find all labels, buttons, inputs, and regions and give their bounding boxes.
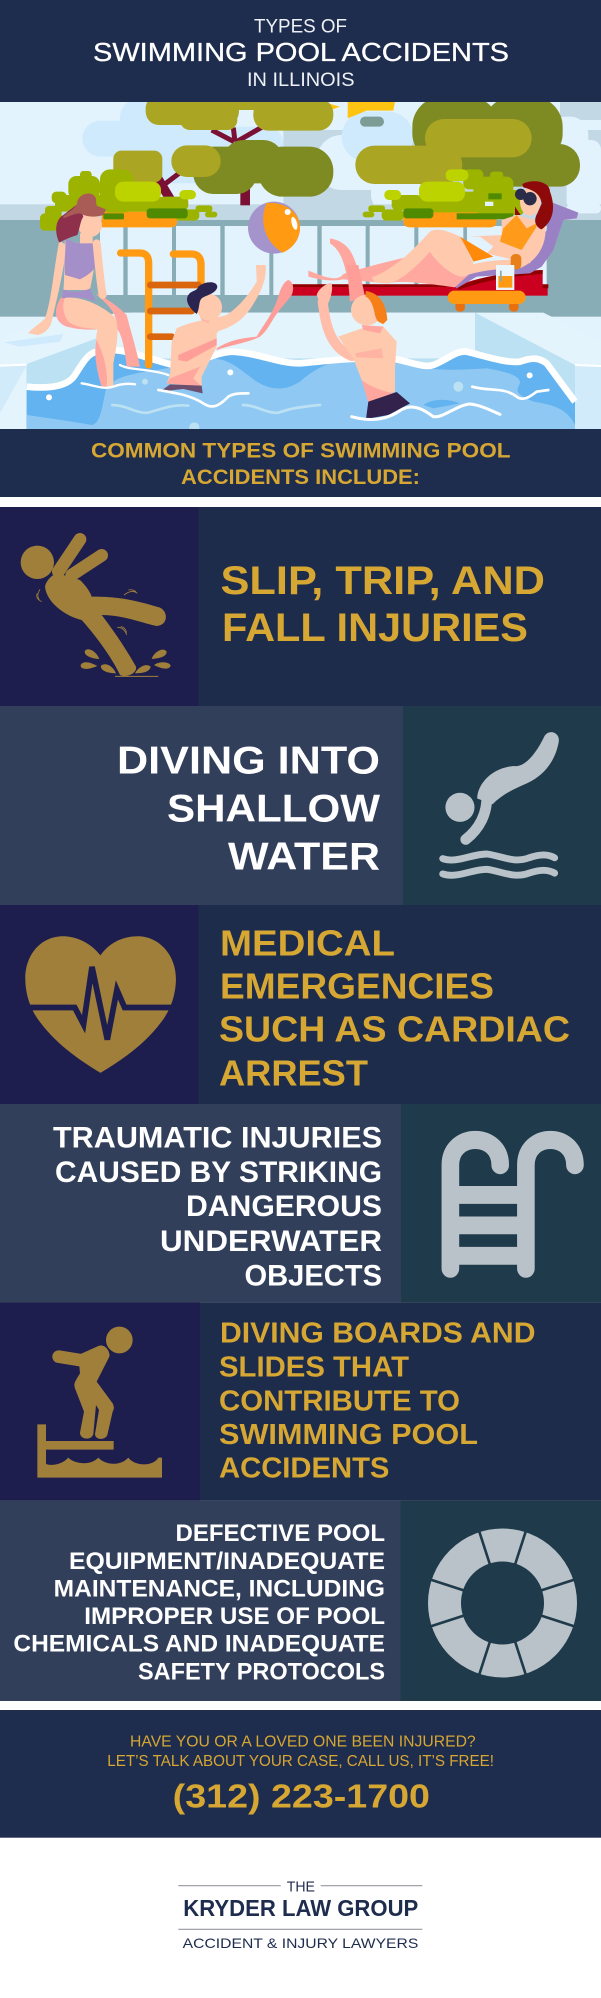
text: diving boards: DIVING BOARDS AND bbox=[220, 1318, 536, 1350]
text: diving into shallow water: WATER bbox=[228, 836, 380, 879]
pool party illustration bbox=[0, 95, 601, 432]
icon: life ring bbox=[428, 1529, 577, 1677]
text: slip trip fall: FALL INJURIES bbox=[222, 606, 528, 650]
header title band: SWIMMING POOL ACCIDENTS bbox=[93, 37, 509, 67]
panel: diving boards and slides bbox=[0, 1303, 601, 1501]
text: defective equipment: CHEMICALS AND INADEQUATE bbox=[13, 1631, 385, 1658]
text: diving boards: CONTRIBUTE TO bbox=[219, 1386, 460, 1418]
subheading band: ACCIDENTS INCLUDE: bbox=[181, 466, 420, 489]
header title band bbox=[0, 0, 601, 102]
man with dark hair bbox=[160, 265, 293, 393]
pool deck bbox=[111, 312, 552, 317]
panel: slip, trip and fall bbox=[0, 507, 601, 706]
text: defective equipment: IMPROPER USE OF POOL bbox=[84, 1603, 385, 1630]
header title band: IN ILLINOIS bbox=[247, 69, 354, 91]
logo: The Kryder Law Group: KRYDER LAW GROUP bbox=[183, 1895, 418, 1921]
icon: falling person bbox=[21, 539, 171, 676]
text: traumatic injuries: CAUSED BY STRIKING bbox=[55, 1156, 382, 1189]
icon: pool ladder bbox=[450, 1140, 575, 1269]
text: diving into shallow water bbox=[117, 740, 380, 879]
text: slip trip fall bbox=[220, 559, 545, 650]
icon: diver bbox=[443, 732, 559, 875]
subheading band bbox=[0, 429, 601, 497]
text: medical emergencies: ARREST bbox=[219, 1052, 368, 1094]
text: diving into shallow water: SHALLOW bbox=[167, 788, 380, 830]
text: medical emergencies: SUCH AS CARDIAC bbox=[219, 1008, 570, 1050]
call to action band: HAVE YOU OR A LOVED ONE BEEN INJURED? bbox=[130, 1734, 476, 1751]
man with orange hair bbox=[317, 265, 410, 419]
pool water bbox=[27, 350, 575, 429]
text: diving boards: SLIDES THAT bbox=[219, 1352, 409, 1384]
text: traumatic injuries: OBJECTS bbox=[244, 1260, 382, 1293]
text: slip trip fall: SLIP, TRIP, AND bbox=[220, 559, 545, 603]
logo: The Kryder Law Group bbox=[178, 1879, 422, 1951]
text: defective equipment: DEFECTIVE POOL bbox=[176, 1520, 385, 1547]
text: defective equipment: EQUIPMENT/INADEQUATE bbox=[69, 1548, 385, 1575]
call to action band: (312) 223-1700 bbox=[173, 1777, 430, 1814]
text: diving boards: ACCIDENTS bbox=[219, 1453, 389, 1485]
text: medical emergencies bbox=[219, 922, 570, 1094]
logo: The Kryder Law Group: THE bbox=[287, 1879, 315, 1895]
text: defective equipment: MAINTENANCE, INCLUDING bbox=[54, 1576, 385, 1603]
woman sitting bbox=[28, 194, 140, 387]
panel: medical emergencies bbox=[0, 905, 601, 1104]
text: traumatic injuries: DANGEROUS bbox=[186, 1190, 382, 1223]
woman sunbathing bbox=[308, 181, 553, 290]
sun lounger bbox=[289, 202, 578, 312]
logo: The Kryder Law Group: ACCIDENT & INJURY LAWYERS bbox=[183, 1935, 418, 1951]
header title band: TYPES OF bbox=[254, 15, 347, 37]
text: defective equipment: SAFETY PROTOCOLS bbox=[138, 1658, 385, 1685]
call to action band bbox=[0, 1710, 601, 1838]
panel: diving into shallow water bbox=[0, 706, 601, 905]
icon: person on diving board bbox=[37, 1327, 162, 1478]
text: traumatic injuries: UNDERWATER bbox=[160, 1225, 382, 1258]
beach ball bbox=[248, 202, 300, 254]
pool ladder bbox=[121, 253, 202, 365]
subheading band: COMMON TYPES OF SWIMMING POOL bbox=[91, 440, 511, 463]
water ripples bbox=[82, 365, 548, 419]
text: medical emergencies: EMERGENCIES bbox=[220, 966, 494, 1007]
text: traumatic injuries: TRAUMATIC INJURIES bbox=[53, 1121, 382, 1154]
text: diving into shallow water: DIVING INTO bbox=[117, 740, 380, 783]
text: diving boards bbox=[219, 1318, 536, 1485]
panel: defective equipment bbox=[0, 1501, 601, 1701]
icon: heart with pulse bbox=[23, 936, 178, 1073]
text: traumatic injuries bbox=[53, 1121, 382, 1293]
text: diving boards: SWIMMING POOL bbox=[219, 1419, 478, 1451]
text: medical emergencies: MEDICAL bbox=[220, 922, 395, 963]
text: defective equipment bbox=[13, 1520, 385, 1685]
call to action band: LET’S TALK ABOUT YOUR CASE, CALL US, IT’S FREE! bbox=[107, 1753, 494, 1770]
panel: traumatic injuries bbox=[0, 1104, 601, 1303]
